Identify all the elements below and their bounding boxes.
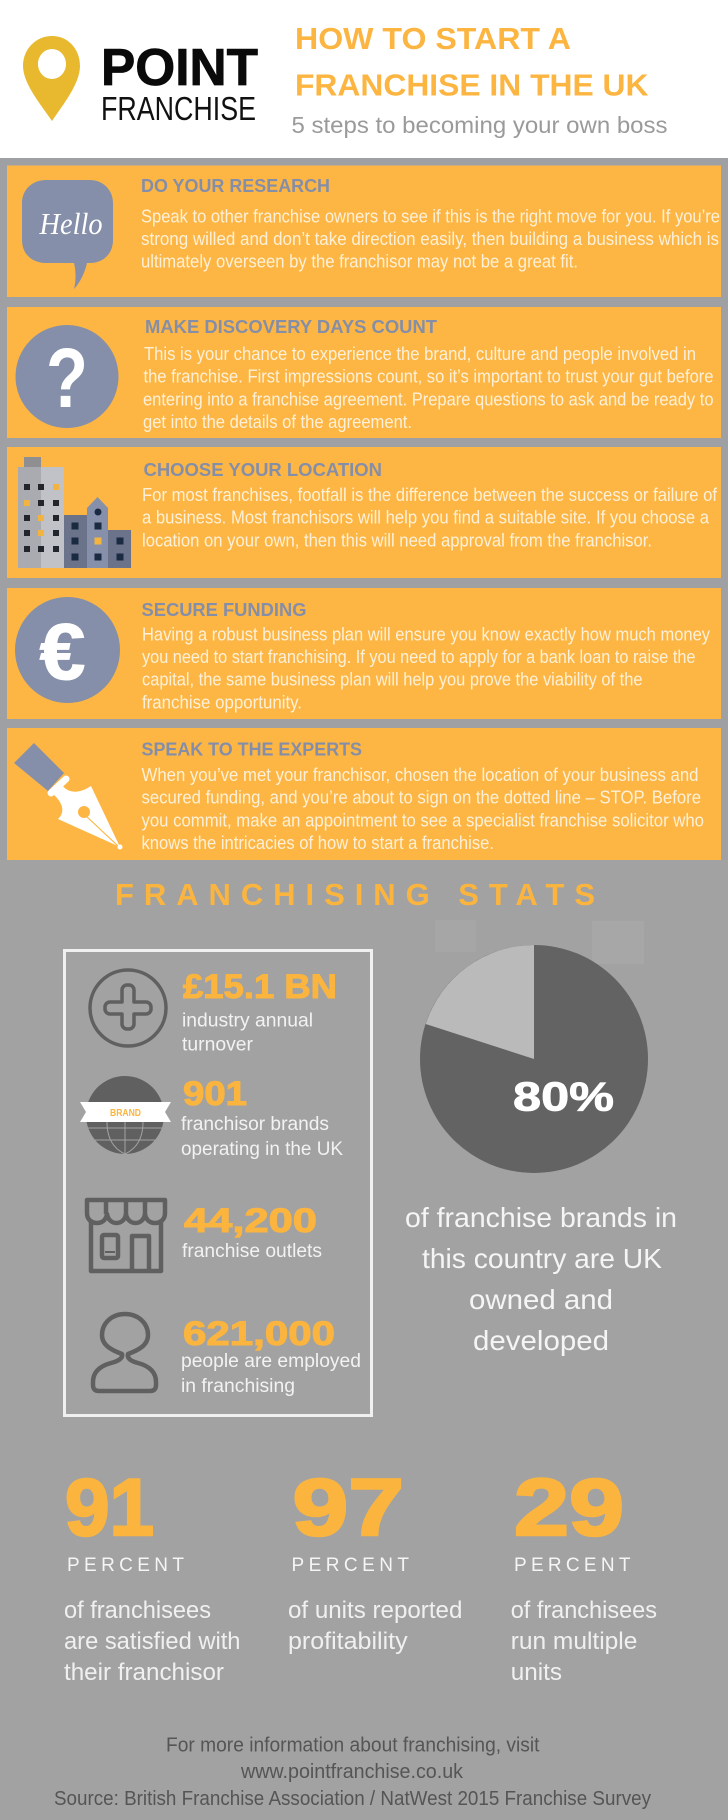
header: logo: [23, 36, 258, 127]
heading: CHOOSE YOUR LOCATION: [144, 460, 382, 480]
stat: brands: [80, 1075, 343, 1160]
stat column: 97 percent: [288, 1463, 462, 1655]
stat column: 91 percent: 91: [65, 1463, 154, 1553]
body text: secured funding, and you’re about to sign on the dotted line – STOP. Before: [142, 788, 701, 808]
stat column: 91 percent: their franchisor: [64, 1659, 224, 1686]
stat column: 29 percent: of franchisees: [511, 1597, 657, 1624]
body text: [142, 624, 710, 712]
heading: franchising stats: FRANCHISING STATS: [115, 877, 595, 912]
heading: MAKE DISCOVERY DAYS COUNT: [145, 317, 437, 337]
stat column: 91 percent: of franchisees: [64, 1597, 211, 1624]
stat: turnover: industry annual: [182, 1011, 313, 1032]
footer text: Source: British Franchise Association / NatWest 2015 Franchise Survey: [54, 1787, 652, 1810]
panel: do your research: [7, 166, 721, 297]
footer text: www.pointfranchise.co.uk: [240, 1760, 464, 1783]
icon: person outline: [93, 1314, 156, 1391]
panel: secure funding: [7, 588, 721, 719]
pie caption: of franchise brands in: [405, 1202, 677, 1233]
icon: fountain pen nib: [14, 743, 122, 850]
stat: outlets: [87, 1200, 322, 1271]
stat: employed: people are employed: [181, 1351, 361, 1372]
stat: turnover: [90, 968, 337, 1056]
logo wordmark: FRANCHISE: [101, 90, 256, 127]
panel: choose your location: [7, 447, 721, 578]
icon: shop front: [87, 1200, 165, 1271]
stat column: 97 percent: of units reported: [288, 1597, 462, 1624]
body text: franchise opportunity.: [142, 692, 302, 712]
title: HOW TO START A: [295, 21, 571, 56]
icon: globe with brand ribbon: [80, 1076, 171, 1154]
stat column: 91 percent: PERCENT: [67, 1555, 184, 1576]
body text: [143, 344, 714, 432]
pie caption: [405, 1202, 677, 1356]
logo wordmark: POINT: [101, 39, 258, 97]
body text: [141, 206, 720, 272]
pie chart: 80%: [420, 945, 648, 1173]
body text: [142, 485, 718, 550]
stat: turnover: turnover: [182, 1035, 254, 1056]
stat: brands: franchisor brands: [181, 1114, 329, 1135]
icon: plus in circle: [90, 970, 166, 1046]
icon: city buildings: [18, 457, 131, 568]
icon: question mark: ?: [46, 331, 88, 425]
icon: hello speech bubble: [22, 180, 113, 289]
stat column: 29 percent: 29: [514, 1463, 624, 1553]
stat: turnover: £15.1 BN: [183, 968, 337, 1006]
stat column: 29 percent: PERCENT: [514, 1555, 631, 1576]
icon: globe with brand ribbon: BRAND: [110, 1108, 141, 1119]
title: FRANCHISE IN THE UK: [295, 68, 649, 103]
pie caption: developed: [473, 1325, 609, 1356]
stat: outlets: franchise outlets: [182, 1241, 322, 1262]
icon: location pin: [23, 36, 80, 121]
stat column: 91 percent: [64, 1463, 240, 1686]
stat column: 29 percent: run multiple: [511, 1628, 637, 1655]
stat: employed: 621,000: [183, 1315, 335, 1353]
title: [295, 21, 649, 103]
heading: DO YOUR RESEARCH: [141, 176, 330, 196]
panel: speak to the experts: [7, 728, 721, 860]
stat: outlets: 44,200: [184, 1202, 317, 1240]
footer text: [54, 1734, 652, 1810]
stat column: 97 percent: 97: [292, 1463, 404, 1553]
body text: capital, the same business plan will help you prove the viability of the: [142, 670, 642, 690]
stat column: 97 percent: profitability: [288, 1628, 408, 1655]
heading: SECURE FUNDING: [142, 600, 306, 620]
stat column: 29 percent: units: [511, 1659, 562, 1686]
icon: hello speech bubble: Hello: [39, 206, 102, 241]
panel: stats box: [64, 950, 372, 1416]
stat column: 91 percent: are satisfied with: [64, 1628, 240, 1655]
stat column: 29 percent: [511, 1463, 657, 1686]
stat: brands: operating in the UK: [181, 1139, 343, 1160]
stat: brands: 901: [183, 1075, 247, 1113]
body text: This is your chance to experience the brand, culture and people involved in: [144, 344, 696, 364]
pie chart: 80%: 80%: [513, 1074, 614, 1120]
panel: make discovery days count: [7, 307, 721, 438]
body text: When you’ve met your franchisor, chosen the location of your business and: [142, 765, 698, 785]
stat column: 97 percent: PERCENT: [292, 1555, 409, 1576]
stat: employed: in franchising: [181, 1376, 295, 1397]
logo wordmark: [101, 39, 258, 127]
footer text: For more information about franchising, visit: [166, 1734, 540, 1757]
icon: euro coin: [15, 597, 120, 703]
subtitle: 5 steps to becoming your own boss: [292, 112, 668, 138]
body text: ultimately overseen by the franchisor may not be a great fit.: [141, 252, 578, 272]
pie caption: this country are UK: [422, 1243, 662, 1274]
body text: [142, 765, 704, 853]
body text: get into the details of the agreement.: [143, 412, 412, 432]
body text: location on your own, then this will need approval from the franchisor.: [142, 530, 652, 550]
heading: SPEAK TO THE EXPERTS: [142, 740, 362, 760]
icon: question mark: [16, 325, 118, 428]
icon: euro coin: €: [40, 607, 86, 696]
stat: employed: [93, 1314, 361, 1397]
pie caption: owned and: [469, 1284, 613, 1315]
body text: knows the intricacies of how to start a franchise.: [142, 833, 494, 853]
